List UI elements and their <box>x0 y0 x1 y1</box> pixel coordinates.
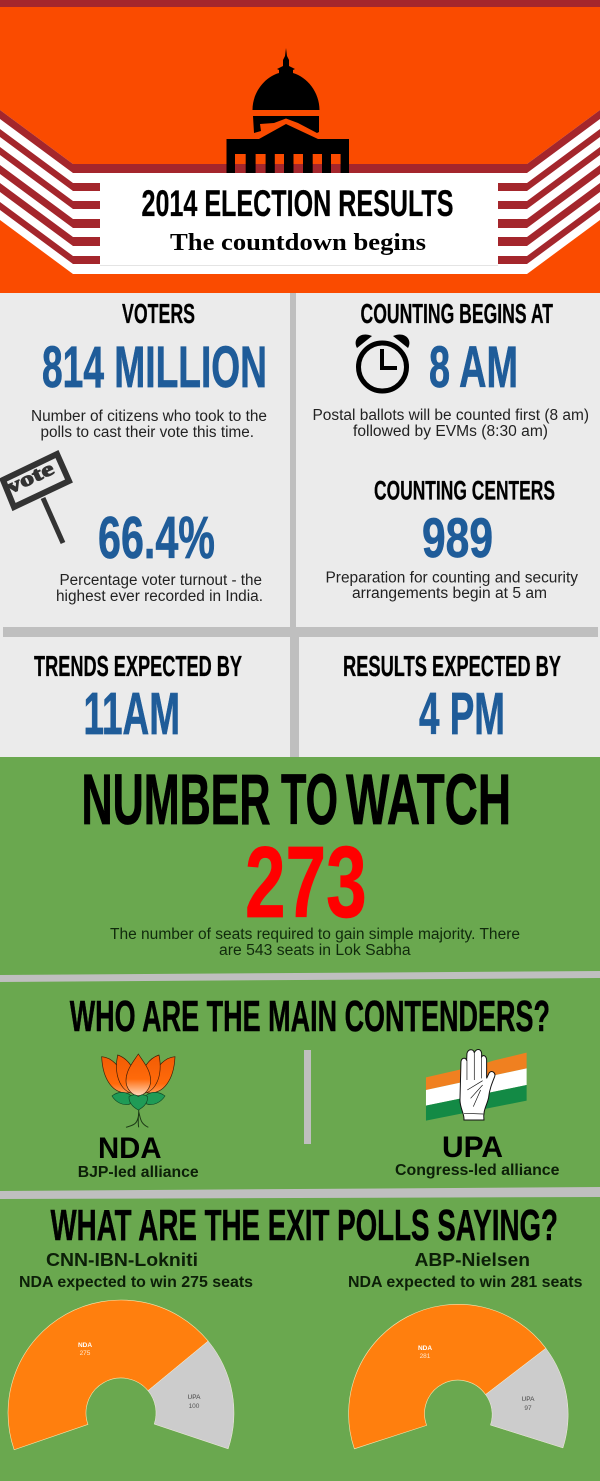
counting block <box>312 298 589 440</box>
panel: key facts <box>0 293 600 757</box>
slice labels: NDA <box>78 1342 92 1349</box>
voters block <box>31 298 267 441</box>
icon: vote sign <box>3 454 69 543</box>
panel: number to watch <box>0 757 600 1481</box>
trends heading: TRENDS EXPECTED BY <box>34 651 242 683</box>
trends time: 11AM <box>84 681 180 747</box>
icon: alarm clock <box>356 334 409 391</box>
counting description: followed by EVMs (8:30 am) <box>353 423 548 440</box>
NDA sublabel: BJP-led alliance <box>78 1164 199 1181</box>
number to watch heading: WATCH <box>346 760 511 840</box>
poll 1 finding: NDA expected to win 275 seats <box>19 1274 253 1291</box>
results block <box>343 651 561 747</box>
chart: CNN-IBN-Lokniti seats <box>8 1300 234 1450</box>
turnout block <box>56 505 263 605</box>
centers number: 989 <box>422 506 493 569</box>
poll 1 source: CNN-IBN-Lokniti <box>46 1249 198 1270</box>
slice labels: NDA <box>418 1345 432 1352</box>
trends block <box>34 651 242 747</box>
turnout number: 66.4% <box>98 505 215 571</box>
slice: NDA 275 <box>8 1300 208 1450</box>
slice labels <box>78 1342 201 1410</box>
number to watch heading: TO <box>281 760 338 840</box>
icon: hand and tricolour <box>426 1049 527 1121</box>
panel: header <box>0 0 600 293</box>
slice labels: UPA <box>522 1396 535 1403</box>
icon: lotus <box>102 1054 175 1127</box>
poll 2 finding: NDA expected to win 281 seats <box>348 1274 583 1291</box>
panel: exit polls <box>8 1201 583 1450</box>
slice labels <box>418 1345 535 1412</box>
slice labels: 97 <box>524 1405 532 1412</box>
number to watch heading: NUMBER <box>82 760 270 840</box>
title: 2014 ELECTION RESULTS <box>142 183 454 224</box>
centers description: Preparation for counting and security <box>326 570 578 586</box>
UPA label: UPA <box>442 1131 503 1164</box>
majority description: The number of seats required to gain simple majority. There <box>110 926 520 943</box>
slice: UPA 100 <box>148 1341 234 1449</box>
voters number: 814 MILLION <box>42 335 267 400</box>
panel: contenders <box>70 992 560 1181</box>
NDA label: NDA <box>98 1132 162 1165</box>
icon: vote sign: vote <box>3 457 58 499</box>
slice: UPA 97 <box>486 1348 568 1448</box>
counting centers block <box>326 476 578 602</box>
results time: 4 PM <box>419 681 505 747</box>
turnout description: highest ever recorded in India. <box>56 588 263 605</box>
slice labels: 275 <box>80 1350 91 1357</box>
slice: NDA 281 <box>349 1304 546 1449</box>
majority description: are 543 seats in Lok Sabha <box>219 942 411 959</box>
UPA sublabel: Congress-led alliance <box>395 1162 560 1179</box>
number 273: 273 <box>245 827 367 939</box>
counting time: 8 AM <box>429 335 518 400</box>
icon: capitol building <box>226 48 349 173</box>
voters description: Number of citizens who took to the <box>31 408 267 425</box>
subtitle: The countdown begins <box>170 230 426 256</box>
NDA block <box>78 1132 199 1181</box>
turnout description: Percentage voter turnout - the <box>60 572 262 589</box>
voters description: polls to cast their vote this time. <box>40 424 254 441</box>
UPA block <box>395 1131 560 1179</box>
counting description: Postal ballots will be counted first (8 am) <box>312 407 589 424</box>
ribbon banner <box>0 110 600 274</box>
slice labels: UPA <box>188 1394 201 1401</box>
slice labels: 100 <box>189 1403 200 1410</box>
poll 2 source: ABP-Nielsen <box>414 1249 530 1270</box>
slice labels: 281 <box>420 1353 431 1360</box>
voters heading: VOTERS <box>122 298 195 329</box>
centers description: arrangements begin at 5 am <box>352 585 547 602</box>
chart: ABP-Nielsen seats <box>349 1304 568 1449</box>
